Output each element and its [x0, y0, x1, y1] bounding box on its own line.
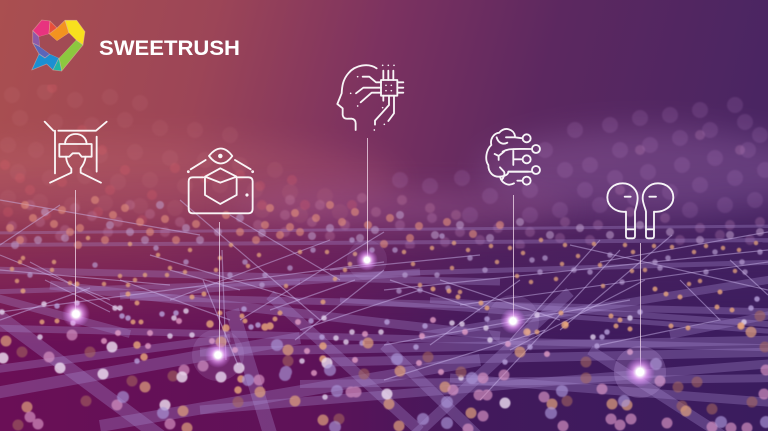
- glowing nodes: [62, 240, 666, 398]
- small mid-band dots: [10, 200, 760, 292]
- logo heart mark: [32, 20, 85, 71]
- large foreground dots: [3, 316, 766, 429]
- medium and small dots, lower field: [2, 284, 757, 397]
- network ribbons: [0, 200, 768, 431]
- soft bokeh band: [0, 88, 768, 245]
- network dots: [2, 200, 766, 429]
- icon: brain network: [486, 129, 540, 185]
- connector lines: [76, 138, 640, 372]
- icon: eye over cube: [188, 148, 253, 213]
- logo wordmark: SWEETRUSH: [99, 37, 240, 60]
- logo: [32, 20, 240, 71]
- icon: AI head with chip: [337, 64, 403, 131]
- icon: wireless earbuds: [607, 183, 673, 238]
- icon: VR headset person: [45, 122, 107, 183]
